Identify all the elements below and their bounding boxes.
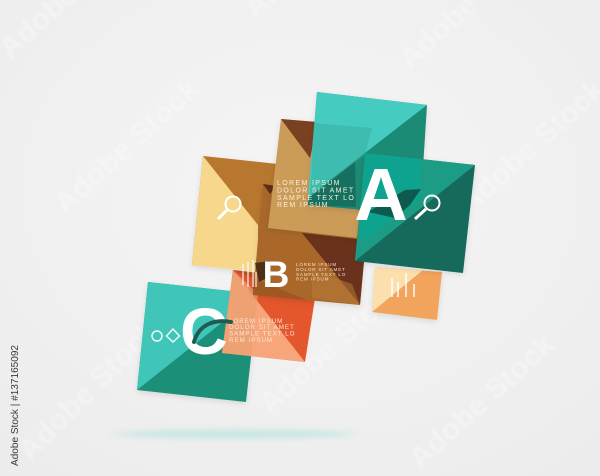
text block: C panel copy: LOREM IPSUM (229, 318, 283, 325)
text block: C panel copy: SAMPLE TEXT LO (229, 330, 295, 338)
text block: A panel copy (277, 180, 355, 209)
icon: bars (392, 273, 414, 297)
letter A: A (354, 153, 408, 236)
text block: C panel copy: REM IPSUM (229, 337, 273, 344)
text block: B panel copy: DOLOR SIT AMET (296, 267, 346, 272)
letter C: C (180, 294, 228, 368)
icon: circle and diamond (152, 329, 180, 342)
panel: orange square (222, 270, 318, 362)
letter B: B (263, 254, 289, 295)
ground shadow (117, 430, 353, 438)
watermark pattern: Adobe Stock (403, 328, 561, 475)
watermark pattern: Adobe Stock (253, 273, 411, 420)
panel: square A (355, 153, 475, 273)
stock id label: Adobe Stock | #137165092 (10, 345, 21, 466)
icon: magnifier left (218, 196, 240, 219)
text block: B panel copy: REM IPSUM (296, 276, 329, 282)
panel: tan square (268, 119, 372, 238)
text block: B panel copy: LOREM IPSUM (296, 262, 337, 267)
panel: small orange square (372, 267, 442, 320)
icon: magnifier right (415, 196, 440, 219)
panel: top teal square (308, 92, 427, 215)
text block: B panel copy: SAMPLE TEXT LO (296, 272, 346, 277)
text block: C panel copy: DOLOR SIT AMET (229, 324, 295, 331)
text block: B panel copy (296, 262, 346, 282)
panel: square C (137, 282, 258, 402)
text block: A panel copy: DOLOR SIT AMET (277, 188, 355, 194)
text block: A panel copy: SAMPLE TEXT LO (277, 195, 355, 202)
panel: yellow left square (192, 156, 278, 272)
panel: brown middle square (233, 184, 366, 305)
text block: A panel copy: REM IPSUM (277, 202, 329, 209)
watermark pattern: Adobe Stock (12, 314, 165, 467)
watermark pattern: Adobe Stock (48, 73, 206, 220)
text block: C panel copy (229, 318, 295, 344)
text block: A panel copy: LOREM IPSUM (277, 180, 341, 187)
icon: bars on orange square (243, 260, 256, 287)
